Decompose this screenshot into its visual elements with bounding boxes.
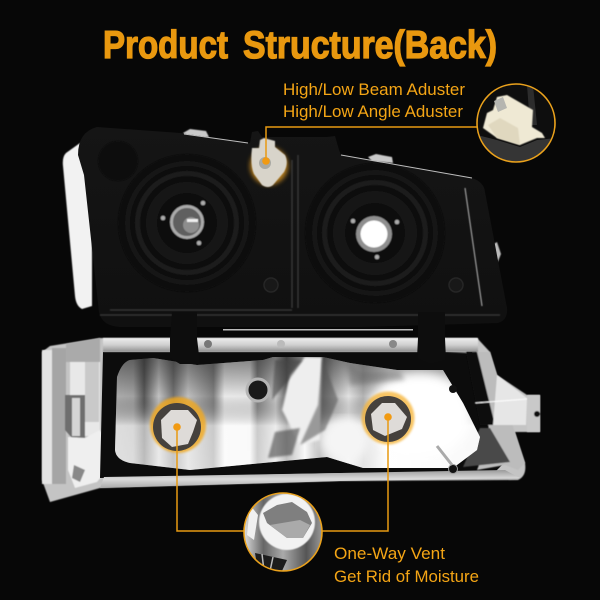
bottom silver strip: [100, 470, 520, 488]
callout connector: adjuster: [266, 127, 478, 161]
right bulb opening: [362, 392, 414, 444]
title: Structure(Back): [243, 24, 497, 67]
title: Product: [103, 24, 228, 67]
left bulb socket rings: [118, 154, 256, 292]
right frame details: [447, 352, 540, 470]
callout dot: right vent: [384, 413, 392, 421]
white lens edge: [63, 143, 92, 309]
housing highlights: [184, 134, 472, 178]
callout connector: vent: [177, 418, 388, 531]
callout circle: adjuster closeup: [477, 84, 556, 165]
callout text: adjuster: High/Low Beam Aduster: [283, 80, 465, 99]
vent hole in reflector: [247, 379, 269, 401]
upper headlight: back view: [63, 127, 507, 327]
small housing bosses: [264, 278, 278, 292]
callout text: adjuster: [283, 80, 465, 121]
thin strip under upper housing: [223, 329, 413, 330]
adjuster, glowing: [250, 138, 288, 187]
callout text: vent: One-Way Vent: [334, 544, 445, 563]
callout text: vent: Get Rid of Moisture: [334, 567, 479, 586]
title: [103, 24, 497, 67]
black housing body: [78, 127, 507, 327]
callout text: vent: [334, 544, 479, 586]
callout dot: adjuster: [262, 157, 270, 165]
dark support brackets: [170, 312, 200, 364]
left frame details: [42, 338, 108, 488]
left bulb opening: [150, 397, 206, 453]
callout text: adjuster: High/Low Angle Aduster: [283, 102, 463, 121]
top chrome rail: [103, 338, 478, 352]
lower headlight: chrome front reflector: [42, 312, 540, 502]
callout circle: vent closeup: [244, 493, 322, 571]
callout dot: left vent: [173, 423, 181, 431]
right bulb socket rings: [305, 163, 445, 303]
reflector bowl: [113, 355, 483, 473]
round plug top left: [98, 141, 138, 181]
small screws on reflector: [449, 385, 457, 393]
chrome frame: [42, 338, 540, 502]
mounting clips: [183, 129, 393, 163]
dark interior: [100, 352, 505, 478]
